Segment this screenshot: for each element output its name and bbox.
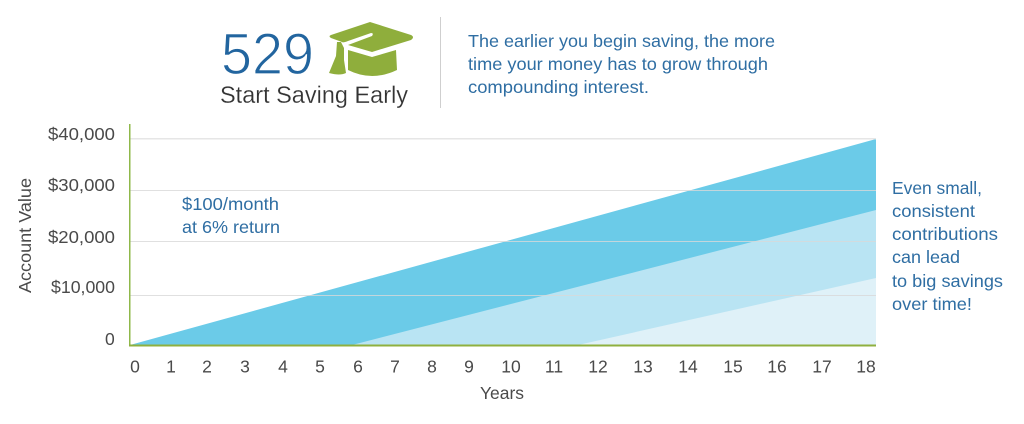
y axis title: Account Value bbox=[15, 178, 35, 293]
y axis line bbox=[129, 124, 130, 346]
y axis labels: $20,000 bbox=[48, 227, 115, 247]
x axis labels: 1 bbox=[166, 356, 176, 376]
y axis labels: $10,000 bbox=[51, 277, 115, 297]
side note: Even small, bbox=[892, 178, 982, 198]
x axis labels: 8 bbox=[427, 356, 437, 376]
side note: over time! bbox=[892, 294, 972, 314]
logo subtitle: Start Saving Early bbox=[220, 82, 408, 109]
x axis labels: 7 bbox=[390, 356, 400, 376]
x axis labels: 17 bbox=[812, 356, 832, 376]
x axis title: Years bbox=[480, 383, 524, 403]
x axis labels: 15 bbox=[723, 356, 743, 376]
side note: contributions bbox=[892, 224, 998, 244]
x axis labels: 6 bbox=[353, 356, 363, 376]
y axis labels: 0 bbox=[105, 329, 115, 349]
logo: 529 Start Saving Early bbox=[220, 22, 413, 109]
x axis labels: 3 bbox=[240, 356, 250, 376]
side note: to big savings bbox=[892, 271, 1003, 291]
y axis labels: $40,000 bbox=[48, 124, 115, 144]
y axis labels: $30,000 bbox=[48, 175, 115, 195]
x axis labels: 10 bbox=[501, 356, 521, 376]
side note: can lead bbox=[892, 247, 960, 267]
x axis labels: 0 bbox=[130, 356, 140, 376]
area: outer contribution band bbox=[130, 139, 876, 345]
intro text bbox=[468, 31, 775, 97]
intro text: compounding interest. bbox=[468, 77, 649, 97]
icon: graduation cap bbox=[329, 22, 413, 76]
side note: consistent bbox=[892, 201, 975, 221]
x axis labels: 16 bbox=[767, 356, 787, 376]
area chart bbox=[129, 124, 876, 346]
x axis labels: 12 bbox=[588, 356, 608, 376]
logo number 529: 529 bbox=[221, 22, 314, 87]
intro text: The earlier you begin saving, the more bbox=[468, 31, 775, 51]
area: middle contribution band bbox=[352, 210, 876, 345]
y axis labels bbox=[48, 124, 115, 349]
intro text: time your money has to grow through bbox=[468, 54, 768, 74]
x axis labels: 13 bbox=[633, 356, 653, 376]
chart annotation bbox=[182, 194, 280, 237]
area: inner contribution band bbox=[578, 278, 876, 345]
x axis labels: 2 bbox=[202, 356, 212, 376]
side note bbox=[892, 178, 1003, 314]
chart annotation: at 6% return bbox=[182, 217, 280, 237]
x axis line bbox=[129, 344, 876, 346]
x axis labels: 14 bbox=[678, 356, 698, 376]
x axis labels bbox=[130, 356, 876, 376]
x axis labels: 9 bbox=[464, 356, 474, 376]
chart annotation: $100/month bbox=[182, 194, 279, 214]
x axis labels: 18 bbox=[856, 356, 876, 376]
x axis labels: 5 bbox=[315, 356, 325, 376]
x axis labels: 4 bbox=[278, 356, 288, 376]
x axis labels: 11 bbox=[545, 356, 563, 376]
